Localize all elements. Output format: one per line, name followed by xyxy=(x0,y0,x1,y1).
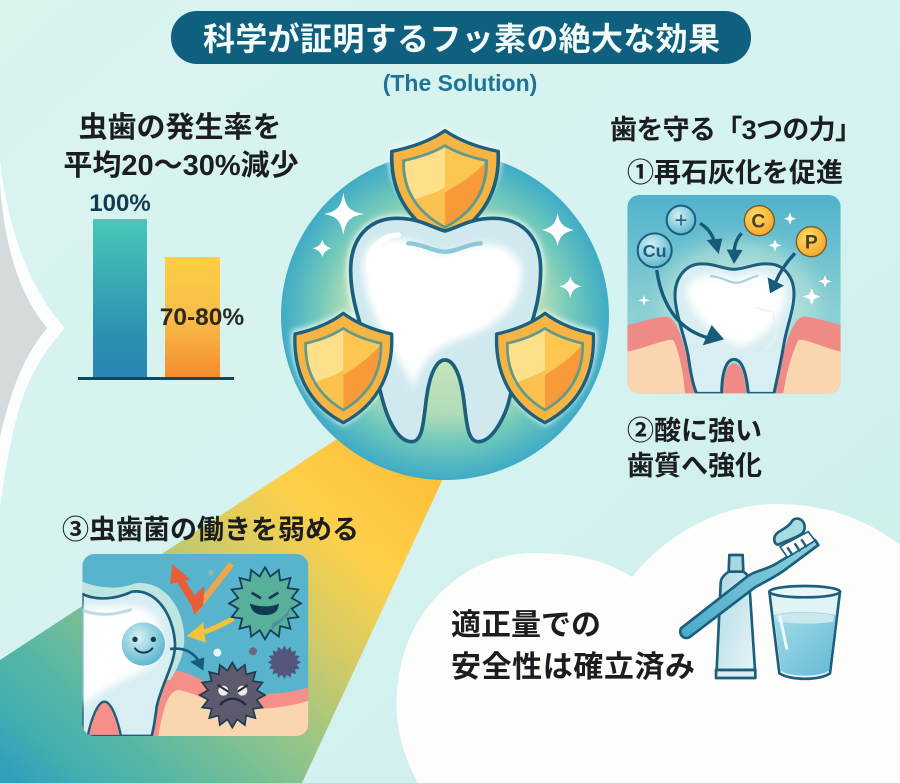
glow behind shields and tooth xyxy=(292,127,597,426)
smiling ion xyxy=(122,622,165,666)
bar chart xyxy=(78,190,234,380)
item 3 heading: ③虫歯菌の働きを弱める xyxy=(62,515,359,545)
tooth xyxy=(82,591,175,736)
small bacterium xyxy=(268,646,301,679)
enamel layer xyxy=(82,582,184,683)
sparkles xyxy=(638,213,832,306)
item 1 heading: ①再石灰化を促進 xyxy=(627,158,843,188)
heading: three powers: 歯を守る「3つの力」 xyxy=(610,115,862,145)
subtitle: (The Solution) xyxy=(383,70,537,96)
dark arrow xyxy=(170,647,199,660)
heading: incidence reduction: 虫歯の発生率を xyxy=(78,111,282,144)
yellow arrow xyxy=(200,618,233,633)
deflected red arrow xyxy=(170,564,232,615)
gums xyxy=(627,317,695,393)
ions xyxy=(667,206,695,234)
right shield xyxy=(497,313,593,423)
glass of water xyxy=(769,586,840,679)
arrows xyxy=(657,223,795,338)
title pill xyxy=(171,11,751,64)
sparkles on disc xyxy=(313,193,582,298)
safety text: 適正量での xyxy=(451,609,601,642)
gum xyxy=(150,671,308,736)
particles xyxy=(213,649,221,657)
safety text: 安全性は確立済み xyxy=(451,651,695,684)
yellow-to-teal light beam xyxy=(0,437,447,783)
panel: bacteria illustration xyxy=(82,554,308,736)
toothpaste tube xyxy=(716,555,755,678)
label: 100%: 100% xyxy=(89,190,151,217)
central tooth with shields xyxy=(281,127,609,480)
panel: remineralization illustration: P xyxy=(805,233,818,254)
heading: incidence reduction: 平均20〜30%減少 xyxy=(63,149,299,182)
panel: remineralization illustration xyxy=(627,195,842,393)
white cloud panel xyxy=(396,504,900,783)
left shield xyxy=(295,313,392,423)
label: 70-80%: 70-80% xyxy=(160,304,244,331)
title pill: 科学が証明するフッ素の絶大な効果 xyxy=(203,21,720,57)
item 2 text xyxy=(627,416,762,481)
teal disc xyxy=(281,152,609,480)
tooth xyxy=(675,264,794,393)
grey chevron at left edge xyxy=(0,160,65,507)
item 2 text: 歯質へ強化 xyxy=(627,451,762,481)
panel: remineralization illustration: C xyxy=(751,212,765,233)
heading: incidence reduction xyxy=(63,111,299,182)
panel: remineralization illustration: Cu xyxy=(643,241,667,261)
icon: toothpaste, toothbrush and glass xyxy=(680,519,840,679)
dark bacterium xyxy=(200,662,265,728)
top shield xyxy=(392,131,498,240)
toothbrush xyxy=(680,519,818,638)
item 2 text: ②酸に強い xyxy=(627,416,762,446)
safety text xyxy=(451,609,695,684)
tooth xyxy=(351,218,541,442)
panel: remineralization illustration: + xyxy=(675,207,687,232)
green bacterium xyxy=(229,567,301,639)
